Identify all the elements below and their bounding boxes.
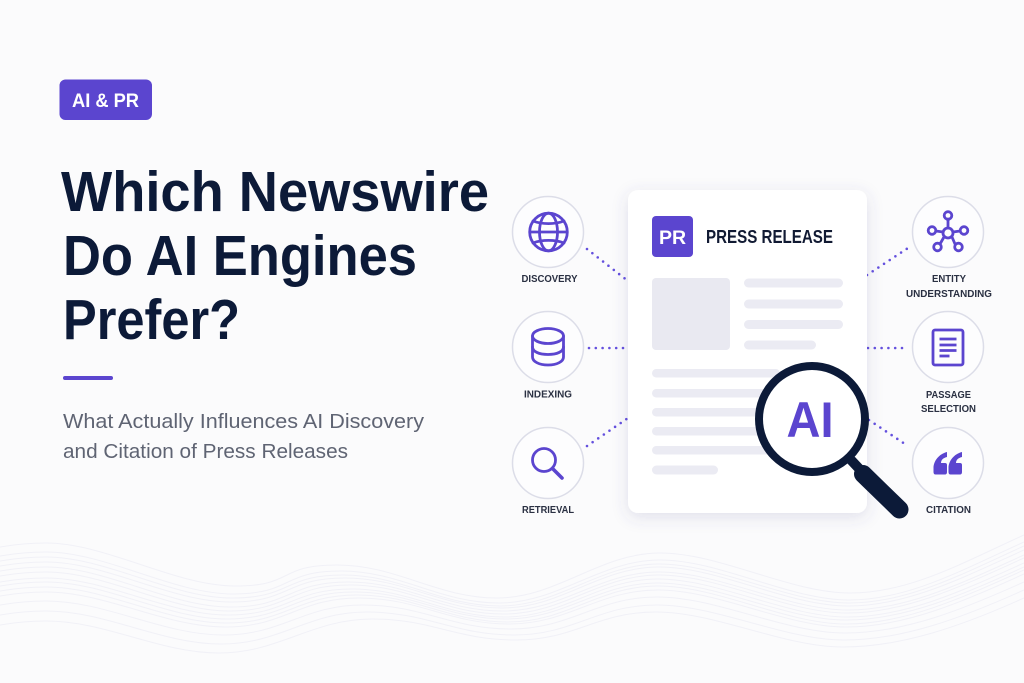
title: Prefer? — [63, 288, 240, 352]
node: entity understanding — [906, 196, 992, 300]
image placeholder — [652, 278, 730, 350]
connector: entity understanding to document — [867, 248, 908, 275]
label: INDEXING — [524, 388, 572, 400]
label: PASSAGE — [926, 389, 971, 401]
badge: AI & PR — [60, 80, 152, 120]
panel: press release document — [628, 190, 867, 513]
connector: passage selection to document — [868, 347, 906, 349]
icon: magnifying glass with AI: AI — [786, 392, 834, 448]
icon: quotation marks — [934, 452, 962, 474]
text placeholder lines: right column — [744, 278, 843, 350]
connector: retrieval to document — [587, 418, 628, 446]
label: ENTITY — [932, 273, 966, 285]
connector: indexing to document — [589, 347, 628, 349]
badge: AI & PR: AI & PR — [72, 90, 139, 112]
label: SELECTION — [921, 403, 976, 415]
icon: PR square: PR — [659, 227, 686, 249]
subtitle — [63, 410, 425, 463]
heading: press release: PRESS RELEASE — [706, 227, 833, 247]
node: indexing — [512, 312, 584, 400]
label: CITATION — [926, 504, 971, 516]
icon: magnifying glass with AI — [759, 366, 900, 510]
subtitle: and Citation of Press Releases — [63, 440, 348, 463]
icon: database — [532, 328, 564, 365]
text placeholder lines: body — [652, 369, 780, 474]
connector: citation to document — [869, 420, 908, 446]
node: discovery — [512, 196, 584, 285]
node: citation — [912, 428, 984, 516]
title: Do AI Engines — [63, 224, 417, 288]
label: DISCOVERY — [522, 273, 578, 285]
accent divider — [63, 376, 113, 380]
icon: document — [933, 330, 963, 365]
label: RETRIEVAL — [522, 504, 575, 516]
icon: globe — [530, 213, 567, 251]
label: UNDERSTANDING — [906, 288, 992, 300]
title: Which Newswire — [61, 160, 489, 224]
icon: PR square — [652, 216, 693, 257]
label — [906, 273, 992, 300]
icon: search — [532, 448, 562, 478]
connector: discovery to document — [587, 249, 628, 281]
subtitle: What Actually Influences AI Discovery — [63, 410, 425, 433]
icon: network nodes — [928, 212, 968, 251]
node: retrieval — [512, 428, 584, 516]
node: passage selection — [912, 312, 984, 415]
label — [921, 389, 976, 415]
title — [61, 160, 489, 352]
